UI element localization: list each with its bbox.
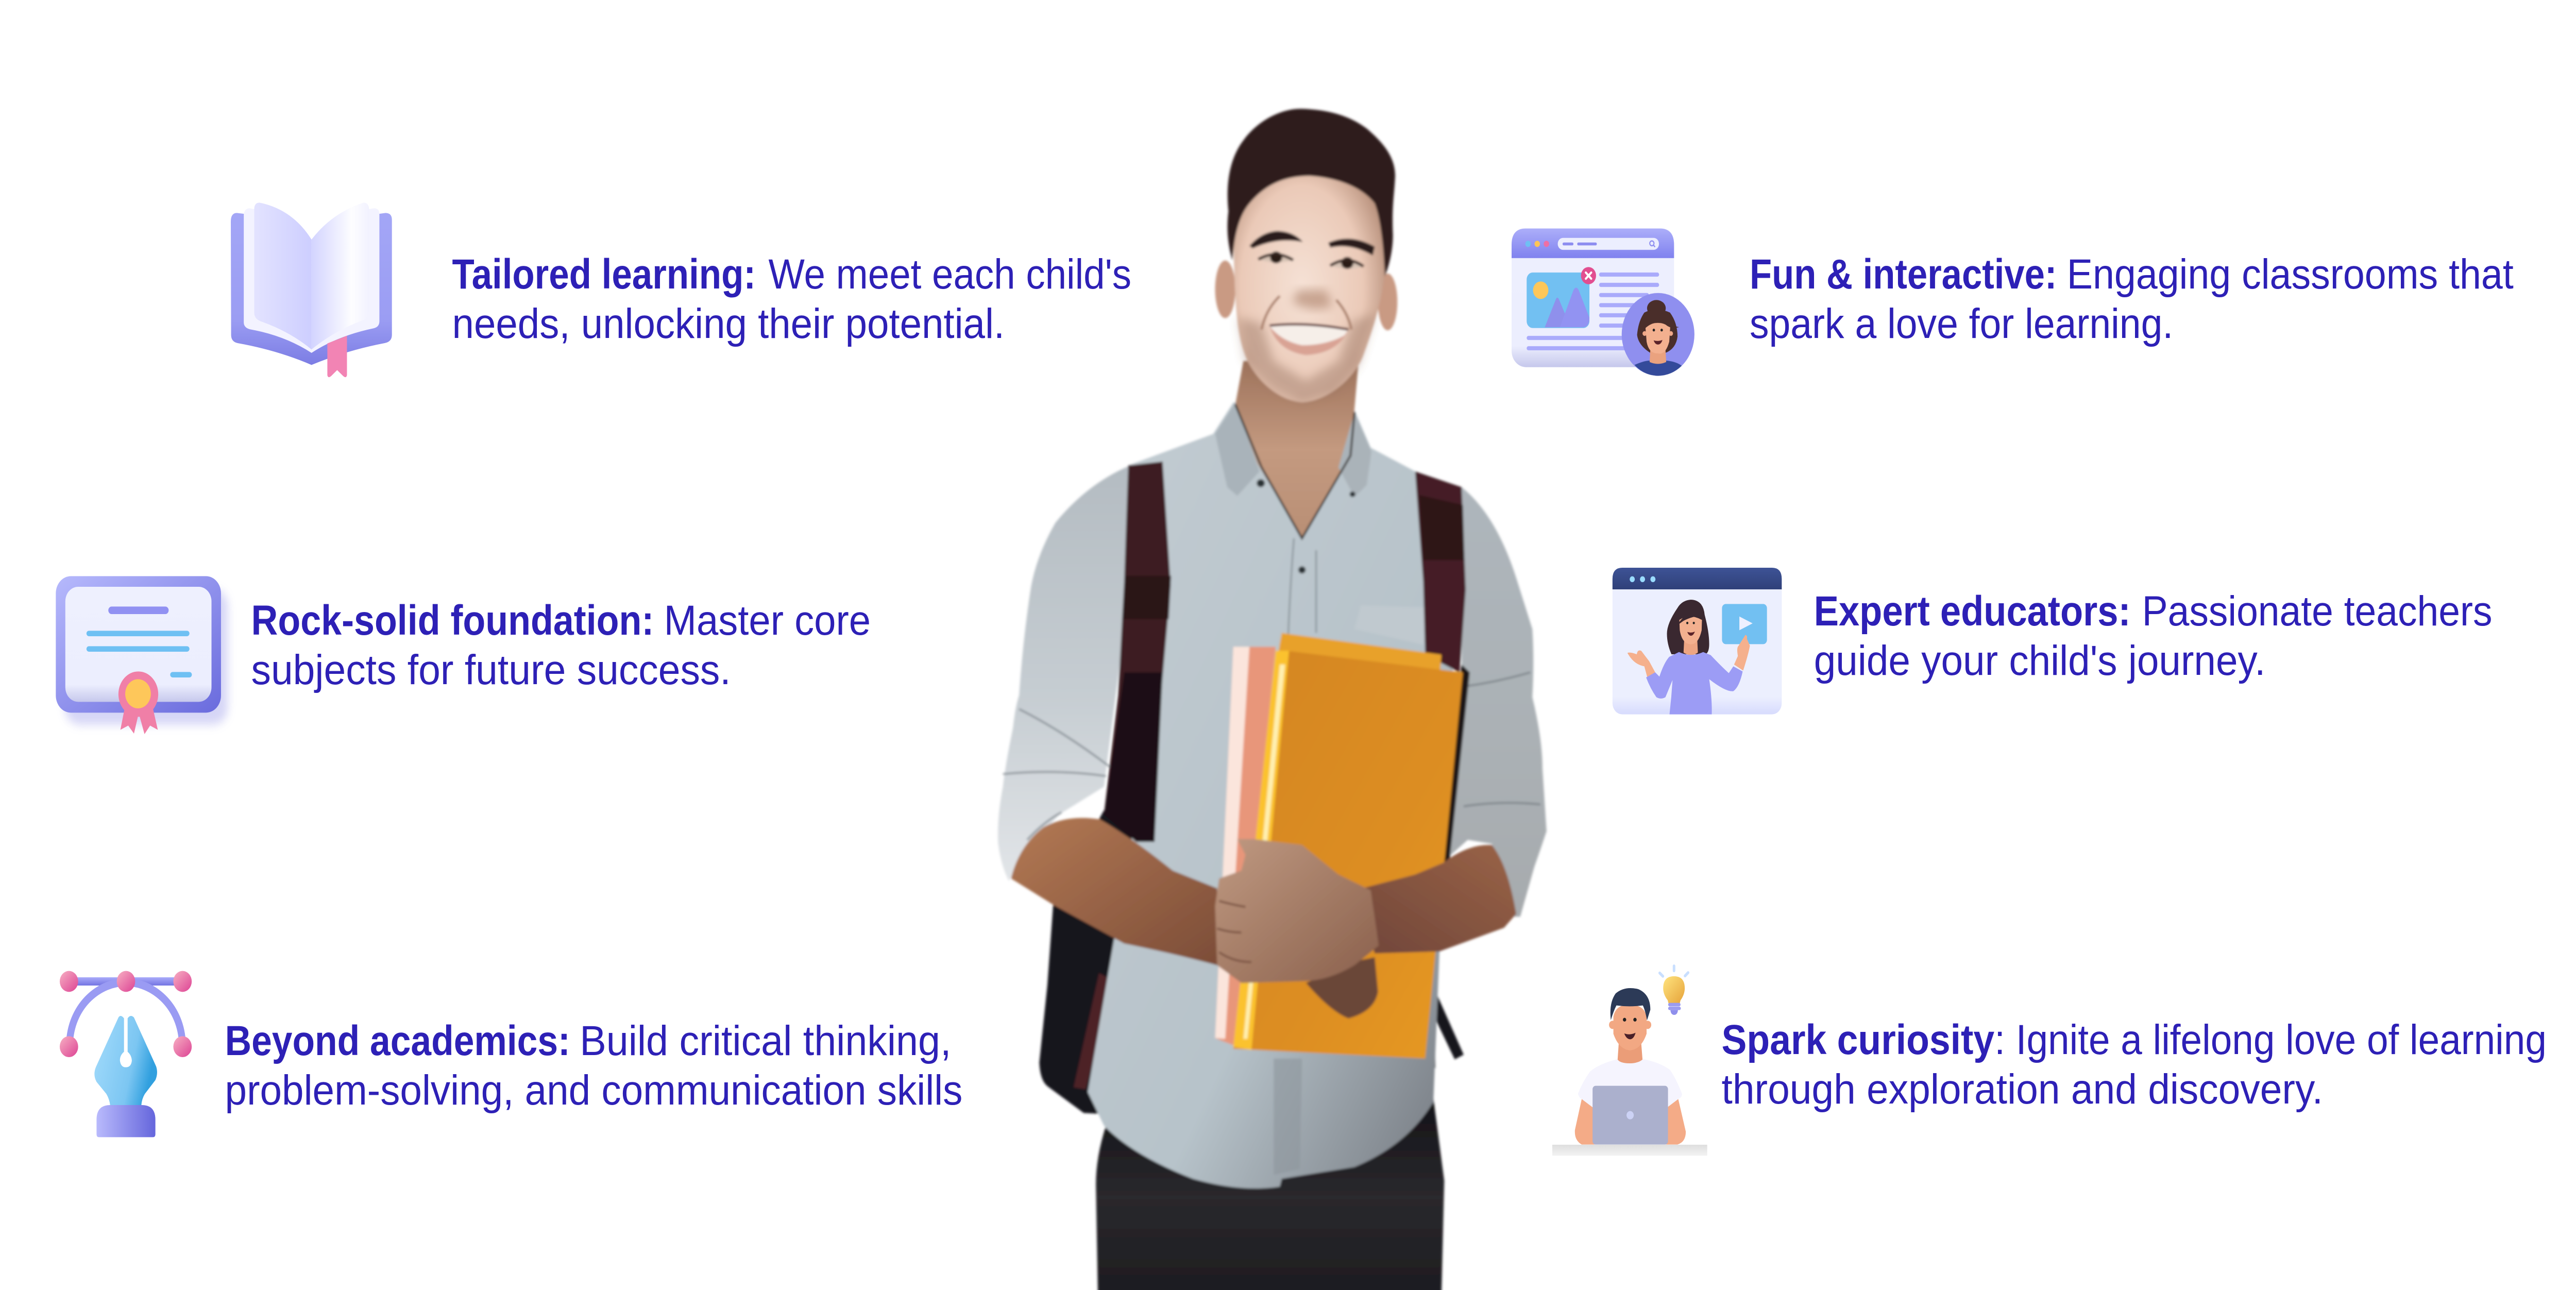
icon: certificate [56, 576, 228, 734]
left sleeve [998, 466, 1130, 881]
text: expert educators: Passionate teachers [2142, 588, 2492, 635]
mouth [1269, 324, 1348, 355]
text: rock-solid foundation [251, 597, 871, 693]
ears [1215, 261, 1397, 330]
panel: beyond academics [60, 971, 962, 1137]
text: spark curiosity: Spark curiosity [1722, 1016, 1994, 1063]
trousers [1096, 1098, 1444, 1290]
orange book [1233, 633, 1463, 1059]
panel: expert educators [1613, 568, 2492, 715]
icon: open book [231, 202, 392, 377]
text: tailored learning [452, 251, 1131, 347]
text: tailored learning: needs, unlocking their potential. [452, 300, 1005, 347]
text: rock-solid foundation: Master core [664, 597, 871, 644]
text: tailored learning: Tailored learning: [452, 251, 756, 298]
text: beyond academics: Build critical thinking, [580, 1017, 951, 1064]
eyebrows [1249, 231, 1375, 256]
text: beyond academics: Beyond academics: [225, 1017, 570, 1064]
text: beyond academics: problem-solving, and communication skills [225, 1067, 962, 1114]
text: tailored learning: We meet each child's [769, 251, 1131, 298]
neck [1235, 361, 1359, 538]
text: fun and interactive: Fun & interactive: [1750, 251, 2057, 298]
backpack body [1039, 810, 1464, 1114]
hair [1228, 109, 1395, 276]
smile lines [1262, 296, 1351, 330]
illustration: student holding books [998, 109, 1547, 1290]
nose [1292, 290, 1332, 309]
text: rock-solid foundation: subjects for future success. [251, 647, 731, 693]
text: expert educators: Expert educators: [1814, 588, 2131, 635]
icon: browser window with avatar [1512, 228, 1694, 376]
text: spark curiosity [1722, 1016, 2547, 1113]
icon: teacher on video screen [1613, 568, 1782, 715]
panel: tailored learning [231, 202, 1131, 377]
shirt collar [1215, 402, 1371, 538]
text: spark curiosity: : Ignite a lifelong love of learning [1994, 1016, 2547, 1063]
eyes [1258, 251, 1363, 269]
text: expert educators [1814, 588, 2492, 684]
text: fun and interactive: Engaging classrooms that [2067, 251, 2514, 298]
panel: rock-solid foundation [56, 576, 871, 734]
left backpack strap [1104, 462, 1171, 842]
lower hand fingers [1306, 957, 1378, 1019]
text: fun and interactive [1750, 251, 2514, 347]
pink book [1215, 647, 1276, 1046]
panel: fun and interactive [1512, 228, 2514, 376]
text: rock-solid foundation: Rock-solid foundation: [251, 597, 654, 644]
panel: spark curiosity [1552, 966, 2547, 1156]
stubble shading [1238, 314, 1375, 402]
text: fun and interactive: spark a love for learning. [1750, 300, 2173, 347]
left forearm [1011, 818, 1217, 965]
text: expert educators: guide your child's journey. [1814, 637, 2265, 684]
face [1233, 148, 1385, 402]
icon: pen tool [60, 971, 192, 1137]
shirt torso [1088, 402, 1462, 1189]
text: beyond academics [225, 1017, 962, 1114]
right backpack strap [1415, 471, 1470, 870]
right sleeve [1444, 487, 1547, 916]
text: spark curiosity: through exploration and discovery. [1722, 1066, 2323, 1113]
icon: student at laptop with light bulb [1552, 966, 1707, 1156]
upper hand [1215, 839, 1379, 983]
right forearm [1354, 845, 1516, 954]
